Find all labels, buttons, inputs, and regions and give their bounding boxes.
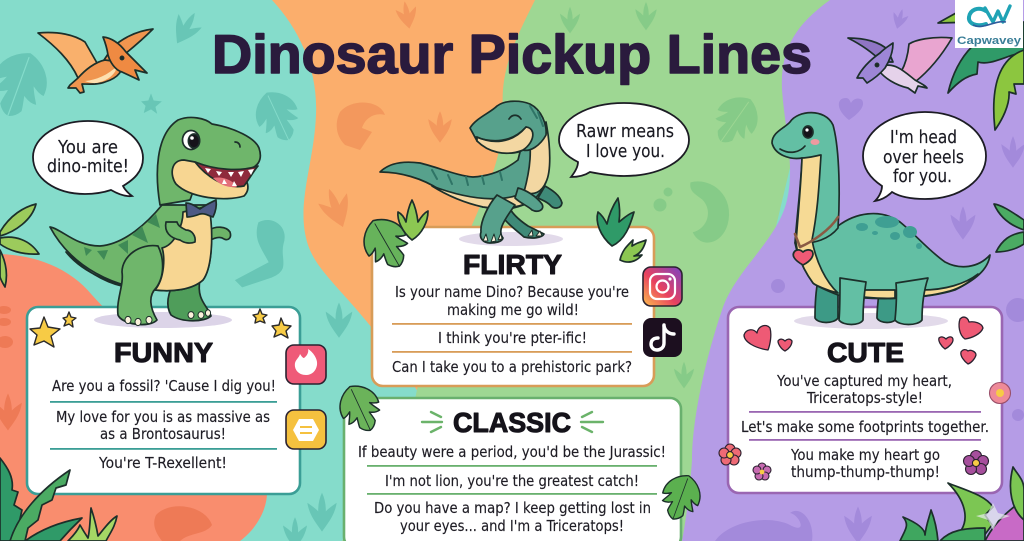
speech bubble: You are dino-mite — [33, 121, 143, 196]
logo: Capwavey: Capwavey — [957, 35, 1022, 47]
icon: bottom right foliage — [900, 467, 1024, 541]
funny lines: My love for you is as massive as — [56, 408, 270, 426]
heading: flirty: FLIRTY — [463, 249, 562, 280]
heading: classic: CLASSIC — [453, 407, 571, 438]
icon: left palm leaf — [0, 204, 39, 287]
classic lines: your eyes... and I'm a Triceratops! — [400, 517, 624, 535]
flirty lines: Is your name Dino? Because you're — [395, 283, 629, 301]
icon: hearts — [744, 317, 983, 364]
orange pterodactyl — [38, 29, 153, 93]
funny lines: Are you a fossil? 'Cause I dig you! — [52, 377, 276, 395]
belly — [155, 206, 212, 291]
chest stripe — [796, 155, 838, 293]
near arm — [166, 222, 195, 243]
smile — [780, 146, 805, 152]
eye — [803, 126, 813, 138]
speech bubble: I'm head over heels for you: over heels — [883, 148, 964, 168]
far legs — [815, 280, 838, 322]
classic lines: If beauty were a period, you'd be the Jurassic! — [358, 443, 666, 461]
body spots — [856, 216, 922, 249]
heading: funny: FUNNY — [114, 337, 213, 368]
stripes — [432, 106, 543, 185]
flirty lines: I think you're pter-ific! — [438, 329, 587, 347]
neck and head — [772, 113, 839, 243]
speech bubble: I'm head over heels for you: for you. — [893, 167, 952, 187]
icon: instagram — [643, 267, 682, 306]
cute lines: You make my heart go — [790, 446, 940, 464]
icon: bottom left foliage — [0, 458, 117, 541]
tail underside — [66, 252, 155, 290]
icon: tinder — [286, 345, 326, 384]
cute lines: Let's make some footprints together. — [741, 418, 989, 436]
bow tie — [186, 200, 216, 217]
jaw — [477, 127, 533, 153]
t-rex — [50, 117, 260, 326]
icon: foliage around flirty — [355, 198, 646, 277]
body and tail — [795, 214, 990, 299]
icon: flowers — [719, 382, 1010, 480]
near leg — [480, 195, 515, 243]
near leg — [118, 246, 163, 325]
classic lines: I'm not lion, you're the greatest catch! — [385, 472, 639, 490]
classic lines: Do you have a map? I keep getting lost in — [374, 499, 651, 517]
heart pendant — [793, 250, 813, 265]
speech bubble: You are dino-mite: dino-mite! — [47, 157, 129, 177]
toes — [125, 310, 211, 326]
brontosaurus — [772, 113, 990, 324]
head — [157, 117, 260, 205]
jaw — [172, 160, 248, 199]
panel: cute — [728, 307, 1002, 493]
speech bubble: Rawr means I love you: I love you. — [586, 142, 665, 162]
funny lines — [50, 377, 277, 472]
classic lines — [358, 443, 666, 535]
cheek — [810, 139, 820, 145]
cute lines: thump-thump-thump! — [791, 463, 940, 481]
teeth — [205, 168, 254, 186]
panel: flirty — [372, 227, 654, 386]
tail underside — [863, 274, 978, 298]
eye — [182, 130, 200, 150]
title: Dinosaur Pickup Lines — [212, 23, 812, 85]
far leg — [497, 205, 544, 238]
far leg — [168, 278, 211, 321]
speech bubble: You are dino-mite: You are — [57, 138, 118, 158]
cute lines: You've captured my heart, — [776, 372, 952, 390]
heading: cute: CUTE — [827, 337, 904, 368]
far arm — [209, 227, 231, 241]
eye closed — [509, 115, 521, 119]
speech bubble: I'm head over heels for you — [863, 112, 986, 201]
mouth line — [476, 127, 526, 141]
icon: bumble — [286, 410, 326, 449]
nostril — [235, 142, 240, 147]
flirty lines: making me go wild! — [447, 301, 579, 319]
icon: right palm leaf — [994, 204, 1024, 252]
purple pterodactyl — [848, 37, 952, 93]
speech bubble: Rawr means I love you: Rawr means — [576, 122, 674, 142]
mouth — [195, 162, 258, 187]
body and tail — [50, 205, 211, 291]
speech bubble: Rawr means I love you — [559, 103, 689, 177]
icon: stars — [30, 309, 291, 347]
funny lines: You're T-Rexellent! — [98, 454, 227, 472]
cute lines: Triceratops-style! — [806, 389, 923, 407]
logo: Capwavey — [955, 0, 1023, 48]
panel: classic — [344, 398, 681, 541]
collar — [795, 217, 838, 247]
far arm — [538, 186, 562, 208]
speech bubble: I'm head over heels for you: I'm head — [890, 128, 957, 148]
shadow under t-rex — [94, 312, 232, 328]
icon: heading sprigs — [422, 412, 603, 432]
back spikes — [84, 145, 170, 260]
watermark sparkle — [976, 503, 1010, 530]
icon: foliage around classic — [332, 378, 706, 525]
belly and neck — [524, 122, 550, 194]
raptor — [380, 101, 562, 243]
near legs — [839, 278, 866, 324]
icon: tiktok — [643, 318, 682, 357]
head — [470, 101, 546, 153]
claws — [483, 230, 542, 242]
tongue — [213, 177, 237, 187]
shadow under raptor — [459, 232, 563, 246]
funny lines: as a Brontosaurus! — [100, 425, 226, 443]
flirty lines: Can I take you to a prehistoric park? — [392, 358, 632, 376]
panel: funny — [27, 307, 300, 494]
flirty lines — [392, 283, 632, 376]
cute lines — [741, 372, 989, 481]
body and tail — [380, 130, 549, 208]
icon: top right palm leaves — [938, 8, 1024, 130]
tail underside — [432, 186, 527, 208]
shadow under brontosaurus — [794, 313, 948, 329]
near arm — [515, 188, 543, 211]
